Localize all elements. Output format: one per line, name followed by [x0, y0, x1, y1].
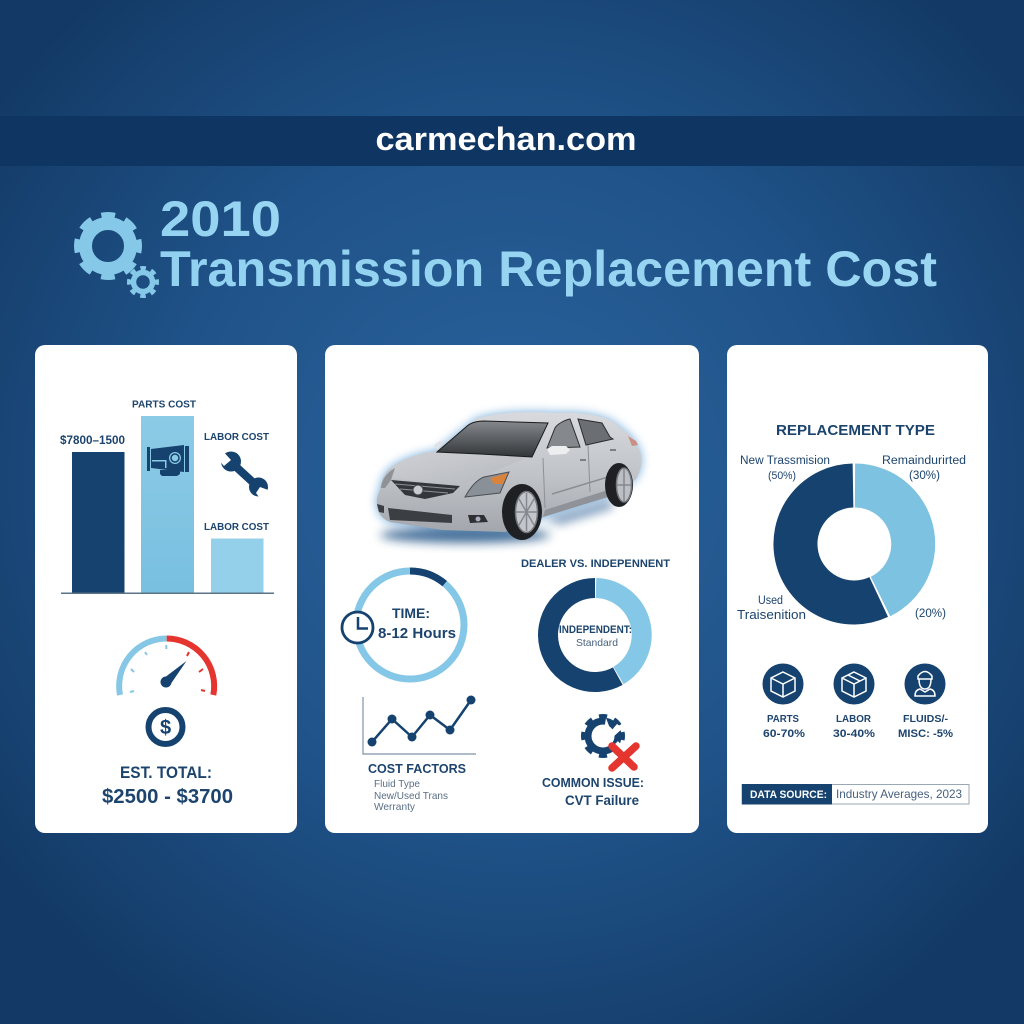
line chart — [363, 696, 476, 754]
bar chart: PARTS COST — [132, 400, 197, 410]
time ring: 8-12 Hours — [378, 625, 456, 642]
cost share labels: MISC: -5% — [898, 728, 953, 740]
icon: gauge — [119, 638, 214, 695]
common issue: COMMON ISSUE: — [542, 776, 644, 790]
data source box — [742, 784, 969, 804]
icon: dollar coin — [148, 710, 182, 744]
donut labels: Used — [758, 595, 783, 607]
panel: cost breakdown — [35, 345, 297, 833]
donut labels: (50%) — [768, 470, 796, 482]
replacement donut chart — [795, 486, 913, 602]
dealer vs independent donut: DEALER VS. INDEPENNENT — [521, 558, 670, 570]
cost factors list: COST FACTORS — [368, 762, 466, 776]
cost factors list: Werranty — [374, 801, 416, 813]
cost factors list — [368, 762, 466, 813]
cost share labels — [763, 713, 953, 740]
bar chart: LABOR COST — [204, 432, 270, 443]
bar chart — [60, 400, 274, 594]
icon: wrench — [215, 449, 271, 504]
time ring — [342, 571, 464, 679]
data source box: DATA SOURCE: — [750, 789, 827, 801]
icon: large gear — [78, 216, 138, 276]
common issue: CVT Failure — [565, 793, 639, 808]
panel: replacement type — [727, 345, 988, 833]
donut labels: (20%) — [915, 608, 946, 620]
icon: transmission — [147, 445, 189, 476]
cost share labels: LABOR — [836, 713, 871, 725]
estimated total: EST. TOTAL: — [120, 764, 212, 782]
bar chart: LABOR COST — [204, 522, 270, 533]
title text: Transmission Replacement Cost — [160, 241, 937, 297]
title with gear icons — [78, 191, 937, 297]
cost factors list: Fluid Type — [374, 778, 420, 790]
header band — [0, 116, 1024, 166]
panel: vehicle and factors — [325, 345, 699, 833]
icon: mechanic — [904, 664, 946, 704]
dealer vs independent donut: INDEPENDENT: — [559, 624, 632, 636]
icon: small gear — [129, 268, 157, 296]
donut labels: New Trassmision — [740, 455, 830, 467]
cost share labels: PARTS — [767, 713, 799, 725]
icon: parts box — [762, 664, 804, 704]
donut labels: Remaindurirted — [882, 455, 966, 467]
icon: labor box — [834, 664, 874, 704]
donut labels — [737, 455, 966, 622]
cost share labels: FLUIDS/- — [903, 713, 949, 725]
cost share labels: 60-70% — [763, 728, 805, 740]
common issue — [542, 776, 644, 808]
bar chart: $7800–1500 — [60, 435, 125, 447]
estimated total — [102, 764, 233, 808]
icon: clock — [342, 612, 373, 643]
estimated total: $2500 - $3700 — [102, 785, 233, 808]
icon: broken gear with red cross — [584, 716, 636, 768]
donut labels: Traisenition — [737, 608, 806, 622]
cost factors list: New/Used Trans — [374, 790, 448, 802]
car illustration — [377, 412, 641, 543]
heading: REPLACEMENT TYPE — [776, 422, 935, 439]
cost share labels: 30-40% — [833, 728, 875, 740]
title year: 2010 — [160, 191, 281, 247]
site name: carmechan.com — [376, 121, 636, 157]
dealer vs independent donut — [521, 558, 670, 682]
icon: dollar coin: $ — [160, 717, 171, 739]
data source box: Industry Averages, 2023 — [836, 787, 962, 801]
time ring: TIME: — [392, 606, 430, 621]
donut labels: (30%) — [909, 470, 940, 482]
dealer vs independent donut: Standard — [576, 637, 618, 649]
